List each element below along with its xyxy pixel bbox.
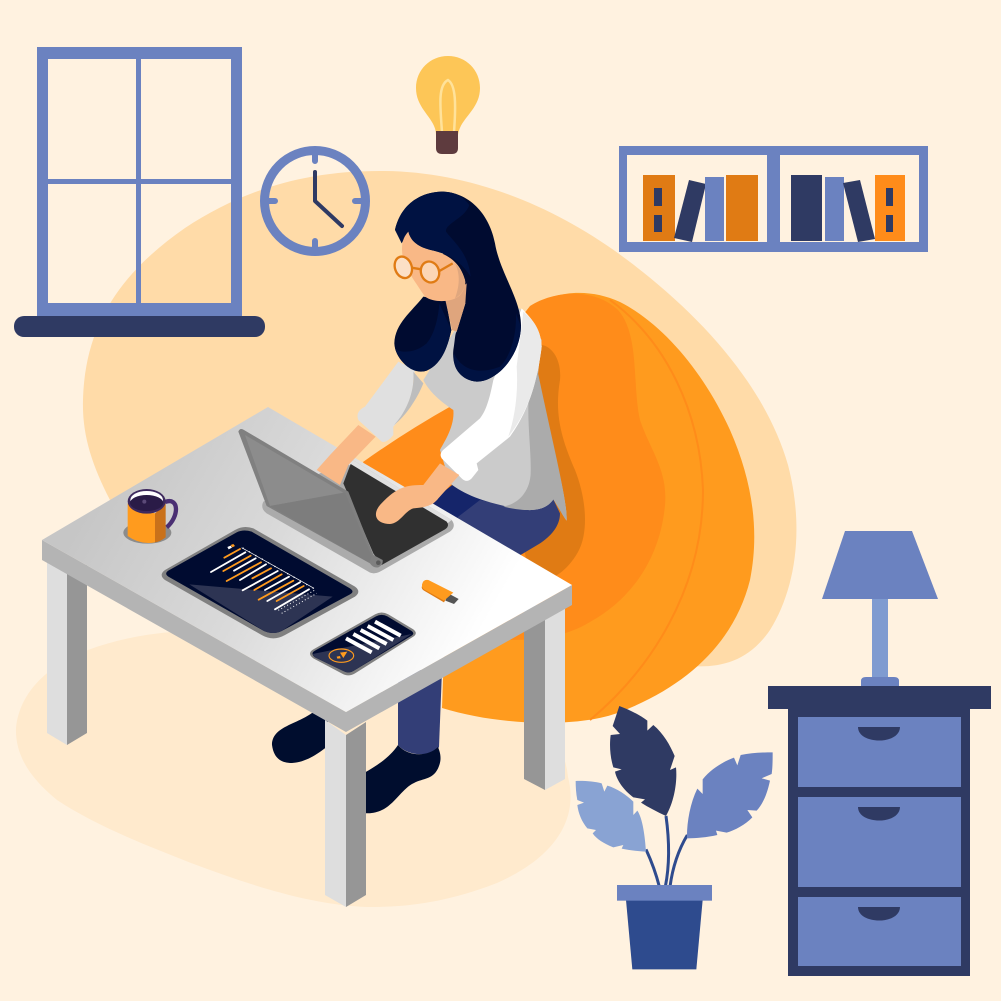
lower leg: [398, 670, 442, 754]
shirt shadow: [503, 367, 567, 521]
top drawer: [798, 717, 961, 787]
neck: [445, 283, 467, 332]
stems: [646, 816, 687, 887]
trousers: [427, 484, 560, 563]
tablet: [162, 527, 358, 638]
left sleeve: [357, 362, 415, 442]
lamp: [822, 531, 938, 686]
glasses: [392, 254, 453, 285]
right sleeve: [441, 308, 542, 481]
light bulb: [416, 56, 480, 154]
cabinet: [768, 686, 991, 976]
desk top: [42, 407, 572, 712]
middle drawer: [798, 797, 961, 887]
bottom drawer: [798, 897, 961, 966]
plant: [576, 706, 773, 969]
blue leaf: [687, 752, 773, 838]
hair: [394, 192, 521, 382]
clock: [264, 150, 366, 252]
dark leaf: [610, 706, 676, 816]
woman: [357, 192, 567, 563]
light leaf: [576, 781, 646, 852]
hands: [317, 425, 459, 524]
pot: [617, 885, 712, 969]
front leg: [325, 720, 366, 907]
usb stick: [422, 580, 459, 604]
phone: [310, 612, 416, 675]
far right leg: [524, 605, 565, 790]
bean bag chair: [363, 293, 754, 723]
face: [402, 232, 465, 301]
bookshelf: [619, 146, 928, 252]
back foot: [272, 713, 328, 763]
laptop: [238, 429, 454, 573]
desk: [42, 407, 572, 907]
shirt torso: [423, 308, 567, 521]
front foot: [364, 745, 441, 813]
background blob: upper: [83, 171, 796, 700]
sleeve highlight: [508, 312, 542, 437]
mug: [123, 489, 176, 544]
window: [14, 47, 265, 337]
background blob: lower: [16, 630, 571, 907]
desk edge: [42, 540, 572, 732]
left leg: [47, 555, 87, 745]
